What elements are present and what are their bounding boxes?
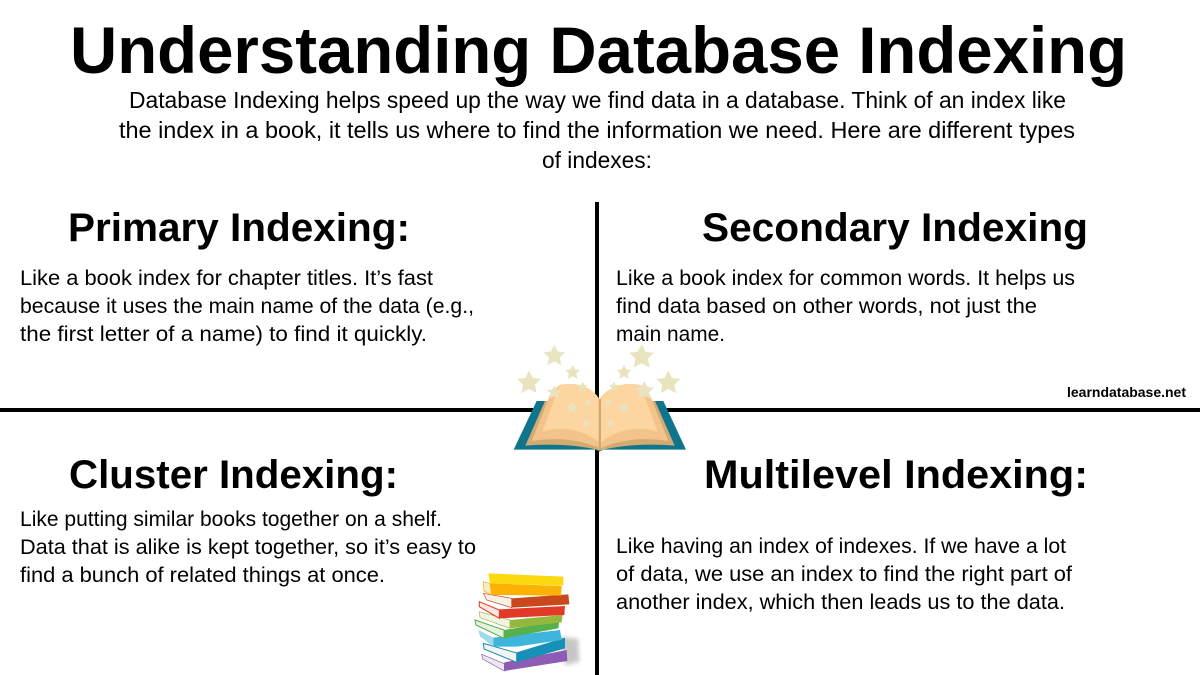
text: cluster indexing description: Data that is alike is kept together, so it’s easy to: [20, 535, 476, 559]
text: multilevel indexing description: Like having an index of indexes. If we have a lot: [616, 534, 1066, 558]
icon: stack of books: [475, 573, 579, 671]
text: primary indexing description: [20, 266, 474, 346]
heading: primary indexing: Primary Indexing:: [68, 206, 410, 250]
text: secondary indexing description: main name.: [616, 322, 725, 346]
icon: open book with stars: [514, 344, 686, 452]
intro text: of indexes:: [542, 147, 652, 173]
text: cluster indexing description: [20, 507, 476, 587]
intro text: the index in a book, it tells us where to find the information we need. Here are different types: [119, 117, 1075, 143]
panel: multilevel indexing: [616, 453, 1088, 614]
source label: learndatabase.net: [1067, 385, 1187, 400]
text: secondary indexing description: Like a book index for common words. It helps us: [616, 266, 1075, 290]
horizontal divider: [0, 408, 1200, 412]
heading: cluster indexing: Cluster Indexing:: [69, 453, 398, 497]
text: primary indexing description: Like a book index for chapter titles. It’s fast: [20, 266, 433, 290]
panel: cluster indexing: [20, 453, 476, 587]
text: primary indexing description: the first letter of a name) to find it quickly.: [20, 322, 427, 346]
heading: multilevel indexing: Multilevel Indexing:: [704, 453, 1088, 497]
text: primary indexing description: because it uses the main name of the data (e.g.,: [20, 294, 474, 318]
vertical divider: [595, 202, 599, 675]
text: multilevel indexing description: [616, 534, 1072, 614]
text: secondary indexing description: find data based on other words, not just the: [616, 294, 1037, 318]
intro text: [119, 87, 1075, 173]
title: Understanding Database Indexing: [70, 13, 1127, 87]
text: secondary indexing description: [616, 266, 1075, 346]
intro text: Database Indexing helps speed up the way we find data in a database. Think of an index like: [129, 87, 1066, 113]
panel: secondary indexing: [616, 206, 1088, 346]
text: cluster indexing description: Like putting similar books together on a shelf.: [20, 507, 442, 531]
text: multilevel indexing description: another index, which then leads us to the data.: [616, 590, 1065, 614]
text: cluster indexing description: find a bunch of related things at once.: [20, 563, 385, 587]
panel: primary indexing: [20, 206, 474, 346]
heading: secondary indexing: Secondary Indexing: [702, 206, 1088, 250]
text: multilevel indexing description: of data, we use an index to find the right part of: [616, 562, 1072, 586]
